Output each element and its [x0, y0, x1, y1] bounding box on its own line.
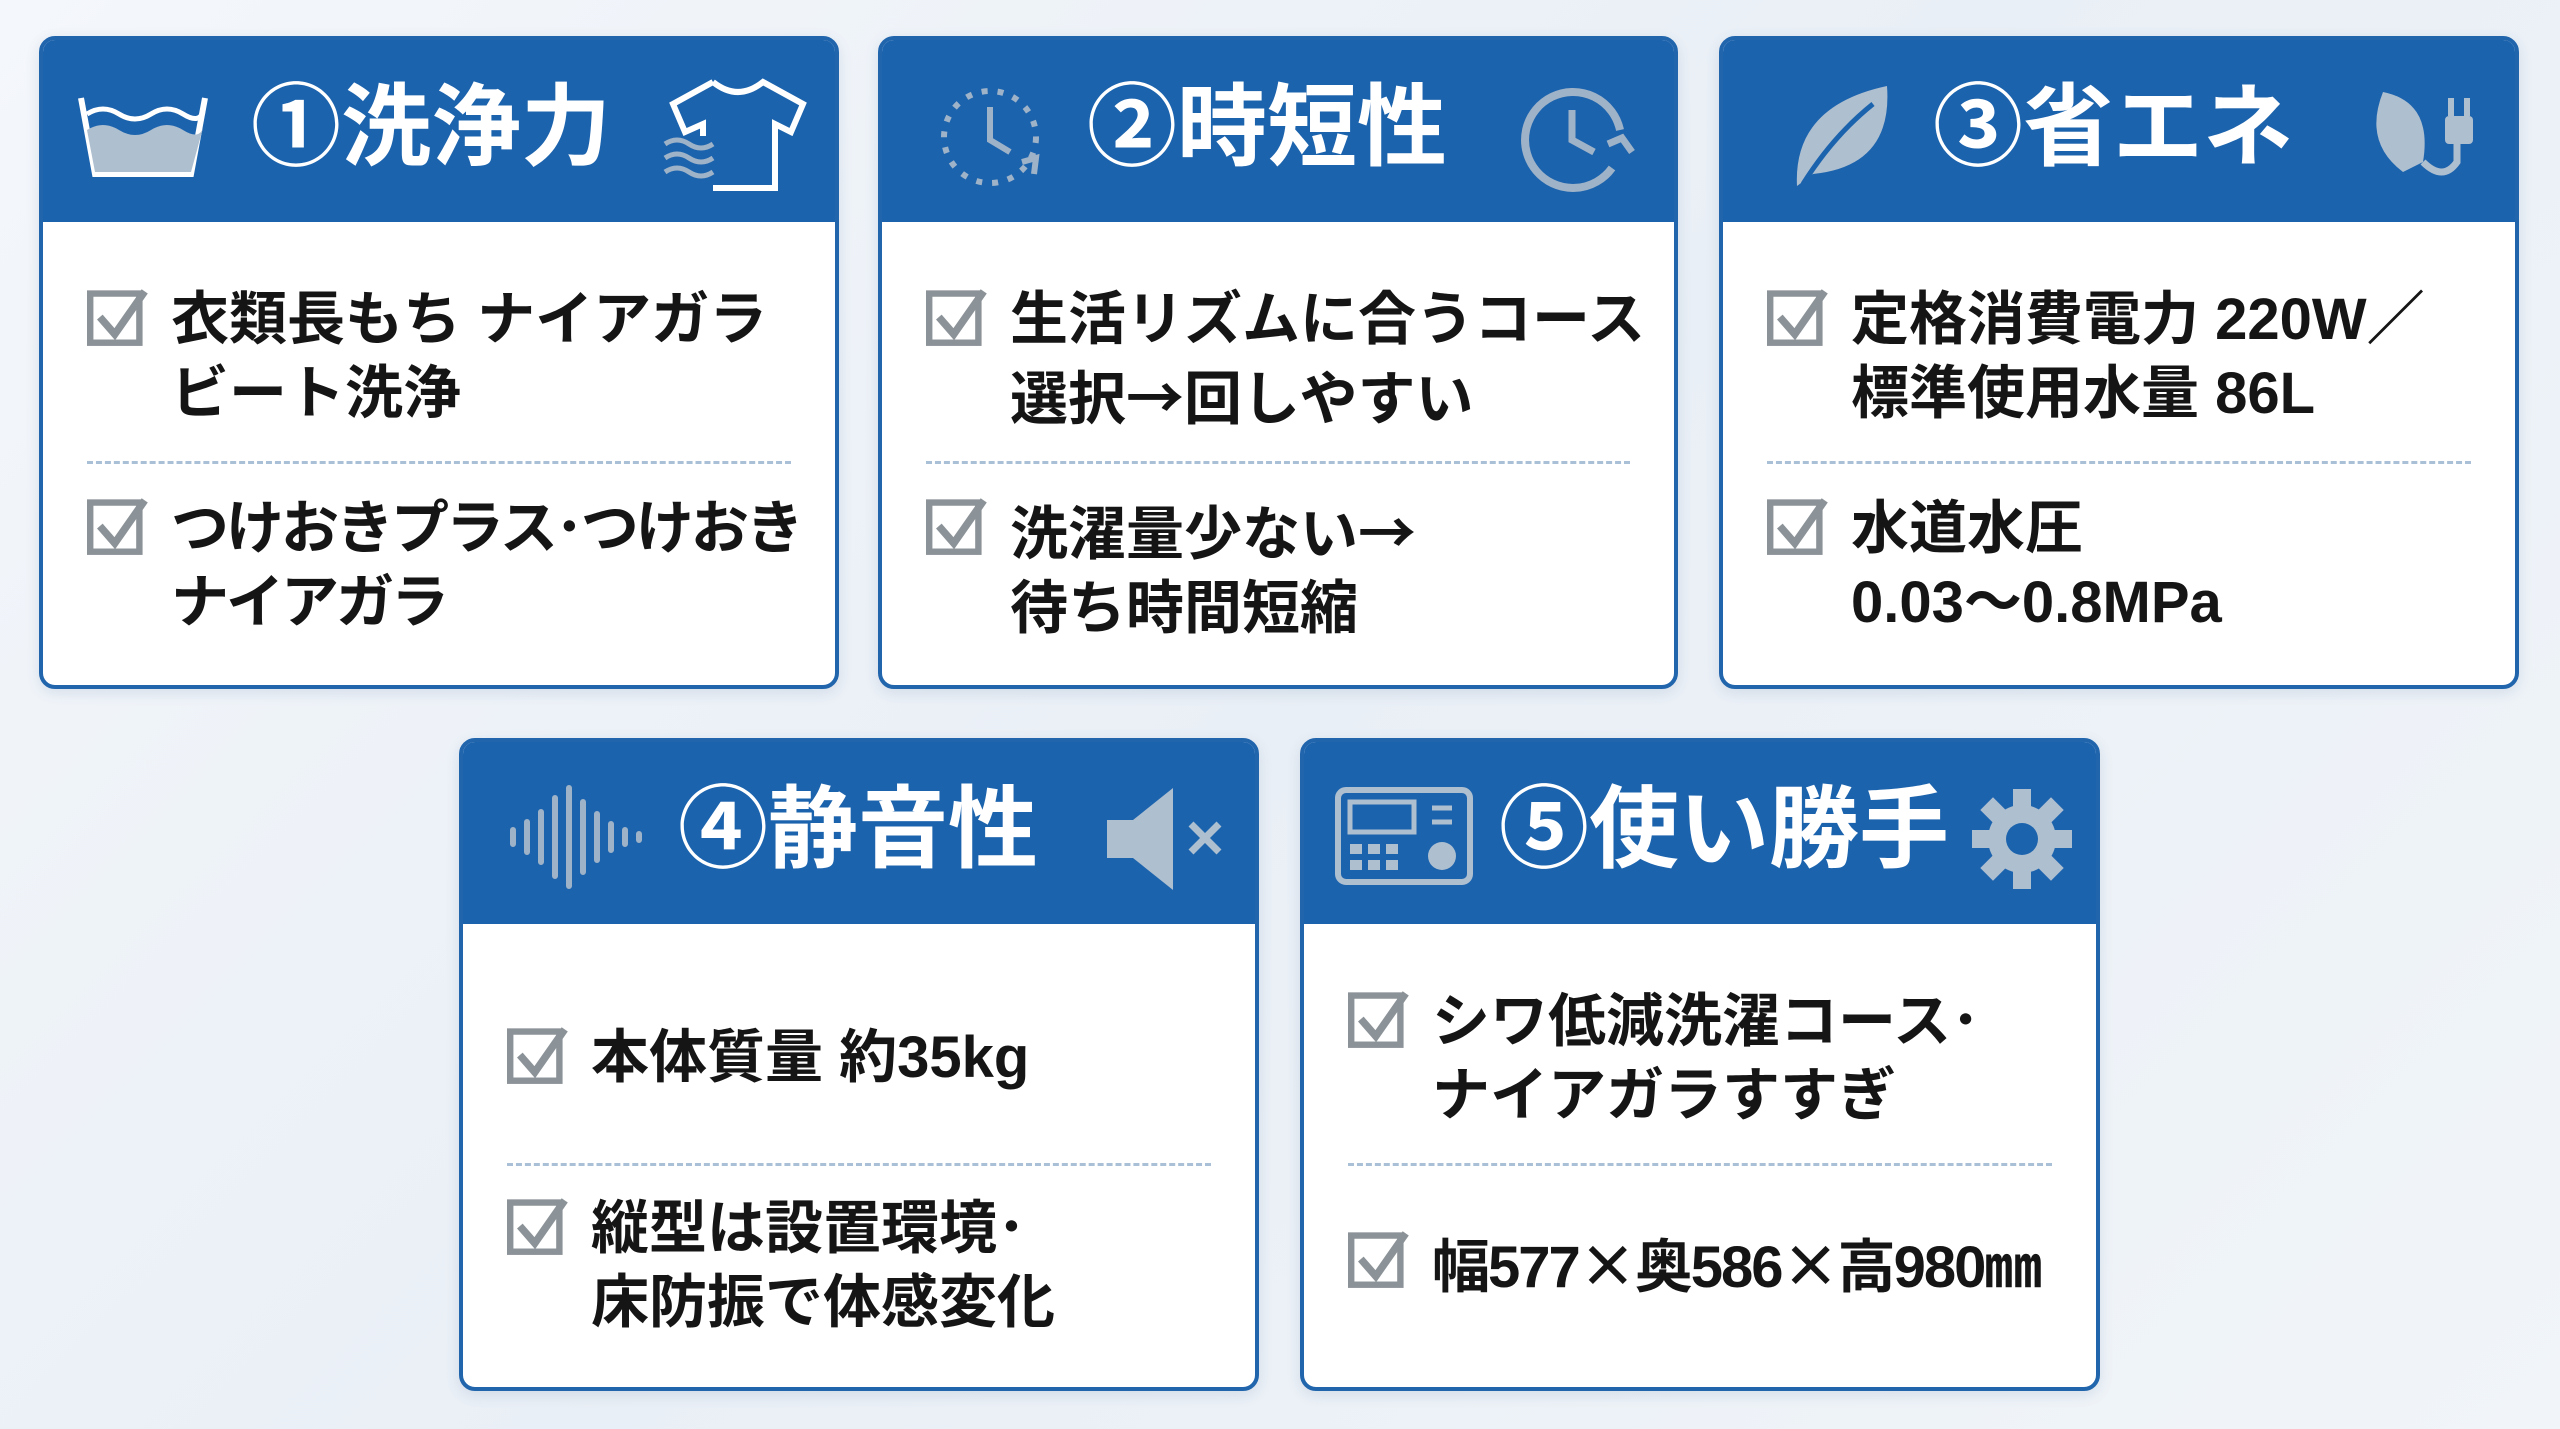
title: ③省エネ: ③省エネ: [1933, 78, 2293, 178]
item: 水道水圧: 水道水圧: [1851, 496, 2083, 561]
panel: 使い勝手: [1300, 738, 2100, 1391]
item: シワ低減: [1348, 989, 1980, 1128]
panel: 省エネ: [1719, 36, 2519, 689]
item: ナイアガラビート洗浄: [87, 287, 767, 426]
icon: wash tub: [78, 98, 208, 177]
icon: leaf: [1796, 86, 1888, 186]
item: 待ち時間短縮: 洗濯量少ない→: [1010, 487, 1416, 571]
icon: t-shirt: [664, 78, 807, 191]
header: 使い勝手: [1304, 742, 2096, 924]
item: 水道水圧: [1767, 496, 2222, 635]
item: ナイアガラビート洗浄: ビート洗浄: [171, 361, 461, 426]
item: ナイアガラビート洗浄: 衣類長もち ナイアガラ: [171, 287, 767, 352]
title: ②時短性: ②時短性: [1087, 78, 1447, 178]
title: ⑤使い勝手: ⑤使い勝手: [1499, 780, 1949, 880]
item: 設置環境: 縦型は設置環境･: [591, 1196, 1026, 1261]
item: 待ち時間短縮: 待ち時間短縮: [1010, 576, 1358, 641]
panel: 洗浄力: [39, 36, 839, 689]
item: 本体質量: 本体質量 約35kg: [591, 1025, 1029, 1090]
icon: leaf plug: [2376, 92, 2473, 176]
item: 消費電力: [1767, 287, 2425, 426]
item: 消費電力: 標準使用水量 86L: [1851, 361, 2315, 426]
item: シワ低減: シワ低減洗濯コース･: [1432, 989, 1980, 1054]
item: つけおき: ナイアガラ: [171, 570, 446, 635]
title: ①洗浄力: ①洗浄力: [251, 78, 611, 178]
header: 洗浄力: [43, 40, 835, 222]
item: 消費電力: 定格消費電力 220W／: [1851, 287, 2425, 352]
item: 設置環境: [507, 1196, 1055, 1335]
header: 省エネ: [1723, 40, 2515, 222]
panel: 時短性: [878, 36, 1678, 689]
item: 寸法: 幅577×奥586×高980㎜: [1432, 1220, 2040, 1304]
icon: clock: [1521, 88, 1635, 192]
item: シワ低減: ナイアガラすすぎ: [1432, 1063, 1896, 1128]
item: コース選択: 選択→回しやすい: [1010, 352, 1473, 436]
icon: gear: [1972, 789, 2072, 889]
item: 水道水圧: 0.03〜0.8MPa: [1851, 570, 2222, 635]
panel: 静音性: [459, 738, 1259, 1391]
icon: control panel: [1335, 787, 1473, 885]
header: 時短性: [882, 40, 1674, 222]
item: コース選択: 生活リズムに合うコース: [1010, 287, 1645, 352]
item: つけおき: つけおきプラス･つけおき: [171, 496, 801, 561]
icon: sound wave: [510, 785, 642, 889]
item: 待ち時間短縮: [926, 487, 1416, 641]
icon: dotted clock: [941, 88, 1040, 186]
header: 静音性: [463, 742, 1255, 924]
item: つけおき: [87, 496, 801, 635]
title: ④静音性: ④静音性: [678, 780, 1038, 880]
item: コース選択: [926, 287, 1645, 436]
icon: muted speaker: [1107, 788, 1222, 890]
item: 設置環境: 床防振で体感変化: [591, 1270, 1055, 1335]
